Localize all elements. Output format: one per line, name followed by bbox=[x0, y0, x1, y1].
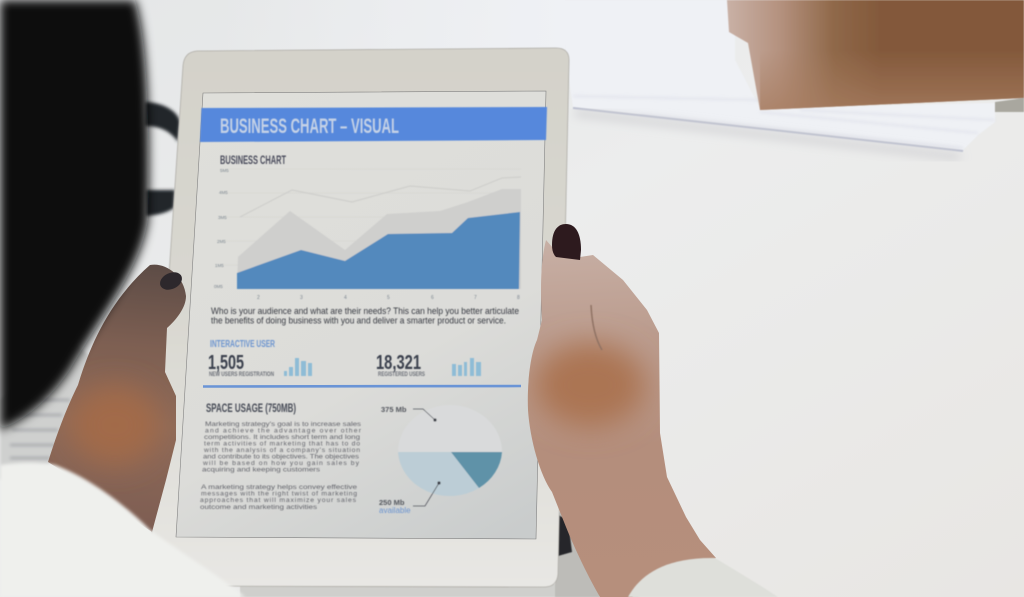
blue area series bbox=[237, 212, 520, 289]
stat 1505: NEW USERS REGISTRATION bbox=[209, 372, 274, 378]
y axis labels: 1M5 bbox=[215, 263, 224, 268]
y axis labels: 2M5 bbox=[217, 239, 226, 244]
body paragraphs: and contribute to its objectives. The objectives bbox=[203, 454, 360, 460]
callout 250 Mb available bbox=[379, 481, 441, 515]
pie lower light slice bbox=[398, 452, 479, 496]
upper line series bbox=[240, 177, 521, 217]
header banner bbox=[200, 107, 547, 142]
right hand and forearm bbox=[520, 225, 720, 597]
dark hair bbox=[0, 0, 149, 430]
brown folder bbox=[727, 0, 1024, 112]
pie top half bbox=[398, 405, 502, 452]
y axis labels: 4M5 bbox=[219, 190, 228, 195]
right thumb crease bbox=[591, 305, 602, 350]
pie dark slice bbox=[451, 452, 502, 488]
description text: the benefits of doing business with you and deliver a smarter product or service. bbox=[211, 316, 506, 326]
pie chart bbox=[379, 405, 502, 515]
left thumb nail bbox=[157, 269, 185, 293]
x axis labels bbox=[257, 295, 520, 301]
body paragraphs: outcome and marketing activities bbox=[200, 504, 318, 511]
white sleeve bbox=[0, 463, 245, 597]
surface below tablet bbox=[240, 584, 640, 597]
tablet screen bbox=[176, 91, 547, 539]
mini bars 1 bbox=[284, 358, 312, 376]
blue divider bbox=[203, 385, 521, 388]
description text: Who is your audience and what are their needs? This can help you better articulate bbox=[211, 306, 519, 316]
white papers stack bbox=[220, 0, 995, 157]
body paragraphs: approaches that will maximize your sales bbox=[200, 497, 357, 504]
body paragraphs: A marketing strategy helps convey effective bbox=[201, 484, 357, 491]
stat 18321: REGISTERED USERS bbox=[378, 372, 425, 378]
grey area series bbox=[237, 189, 521, 289]
x axis labels: 8 bbox=[517, 295, 520, 301]
body paragraphs: with the analysis of a company's situation bbox=[203, 447, 360, 454]
space usage heading: SPACE USAGE (750MB) bbox=[206, 403, 296, 415]
body paragraphs bbox=[200, 421, 362, 511]
x axis labels: 4 bbox=[344, 295, 347, 301]
right sleeve bbox=[628, 558, 778, 597]
chart heading: BUSINESS CHART bbox=[220, 155, 286, 167]
body paragraphs: acquiring and keeping customers bbox=[202, 466, 321, 474]
callout 250 Mb available: available bbox=[379, 506, 411, 515]
stat 1505: 1,505 bbox=[208, 352, 244, 374]
x axis labels: 5 bbox=[387, 295, 390, 301]
left hand bbox=[48, 264, 186, 532]
callout 375 Mb: 375 Mb bbox=[381, 405, 407, 414]
description text bbox=[211, 306, 519, 326]
stat 18321: 18,321 bbox=[376, 352, 421, 374]
banner title: BUSINESS CHART – VISUAL bbox=[220, 115, 399, 138]
stat 1505 bbox=[208, 352, 274, 378]
y axis labels: 3M5 bbox=[218, 215, 227, 220]
y axis labels: 5M5 bbox=[220, 168, 229, 173]
body paragraphs: and achieve the advantage over other bbox=[205, 428, 362, 434]
body paragraphs: will be based on how you gain sales by bbox=[202, 460, 360, 467]
body paragraphs: Marketing strategy's goal is to increase sales bbox=[205, 421, 362, 428]
blurred book page left bbox=[0, 340, 95, 480]
body paragraphs: messages with the right twist of marketing bbox=[201, 490, 357, 498]
callout 250 Mb available: 250 Mb bbox=[379, 498, 405, 507]
x axis labels: 6 bbox=[431, 295, 434, 301]
area chart bbox=[214, 155, 521, 301]
body paragraphs: term activities of marketing that has to do bbox=[204, 440, 360, 448]
x axis labels: 7 bbox=[474, 295, 477, 301]
body paragraphs: competitions. It includes short term and long bbox=[204, 434, 360, 441]
tablet body bbox=[149, 48, 569, 587]
section heading: INTERACTIVE USER bbox=[210, 338, 275, 350]
mini bars 2 bbox=[452, 358, 481, 376]
interactive user section bbox=[208, 338, 481, 378]
dark mug handle bbox=[145, 102, 180, 216]
right thumb nail bbox=[552, 224, 581, 260]
stat 18321 bbox=[376, 352, 425, 378]
y axis labels: 0M5 bbox=[214, 284, 223, 289]
y axis labels bbox=[214, 168, 229, 289]
x axis labels: 2 bbox=[257, 295, 260, 301]
x axis labels: 3 bbox=[300, 295, 303, 301]
